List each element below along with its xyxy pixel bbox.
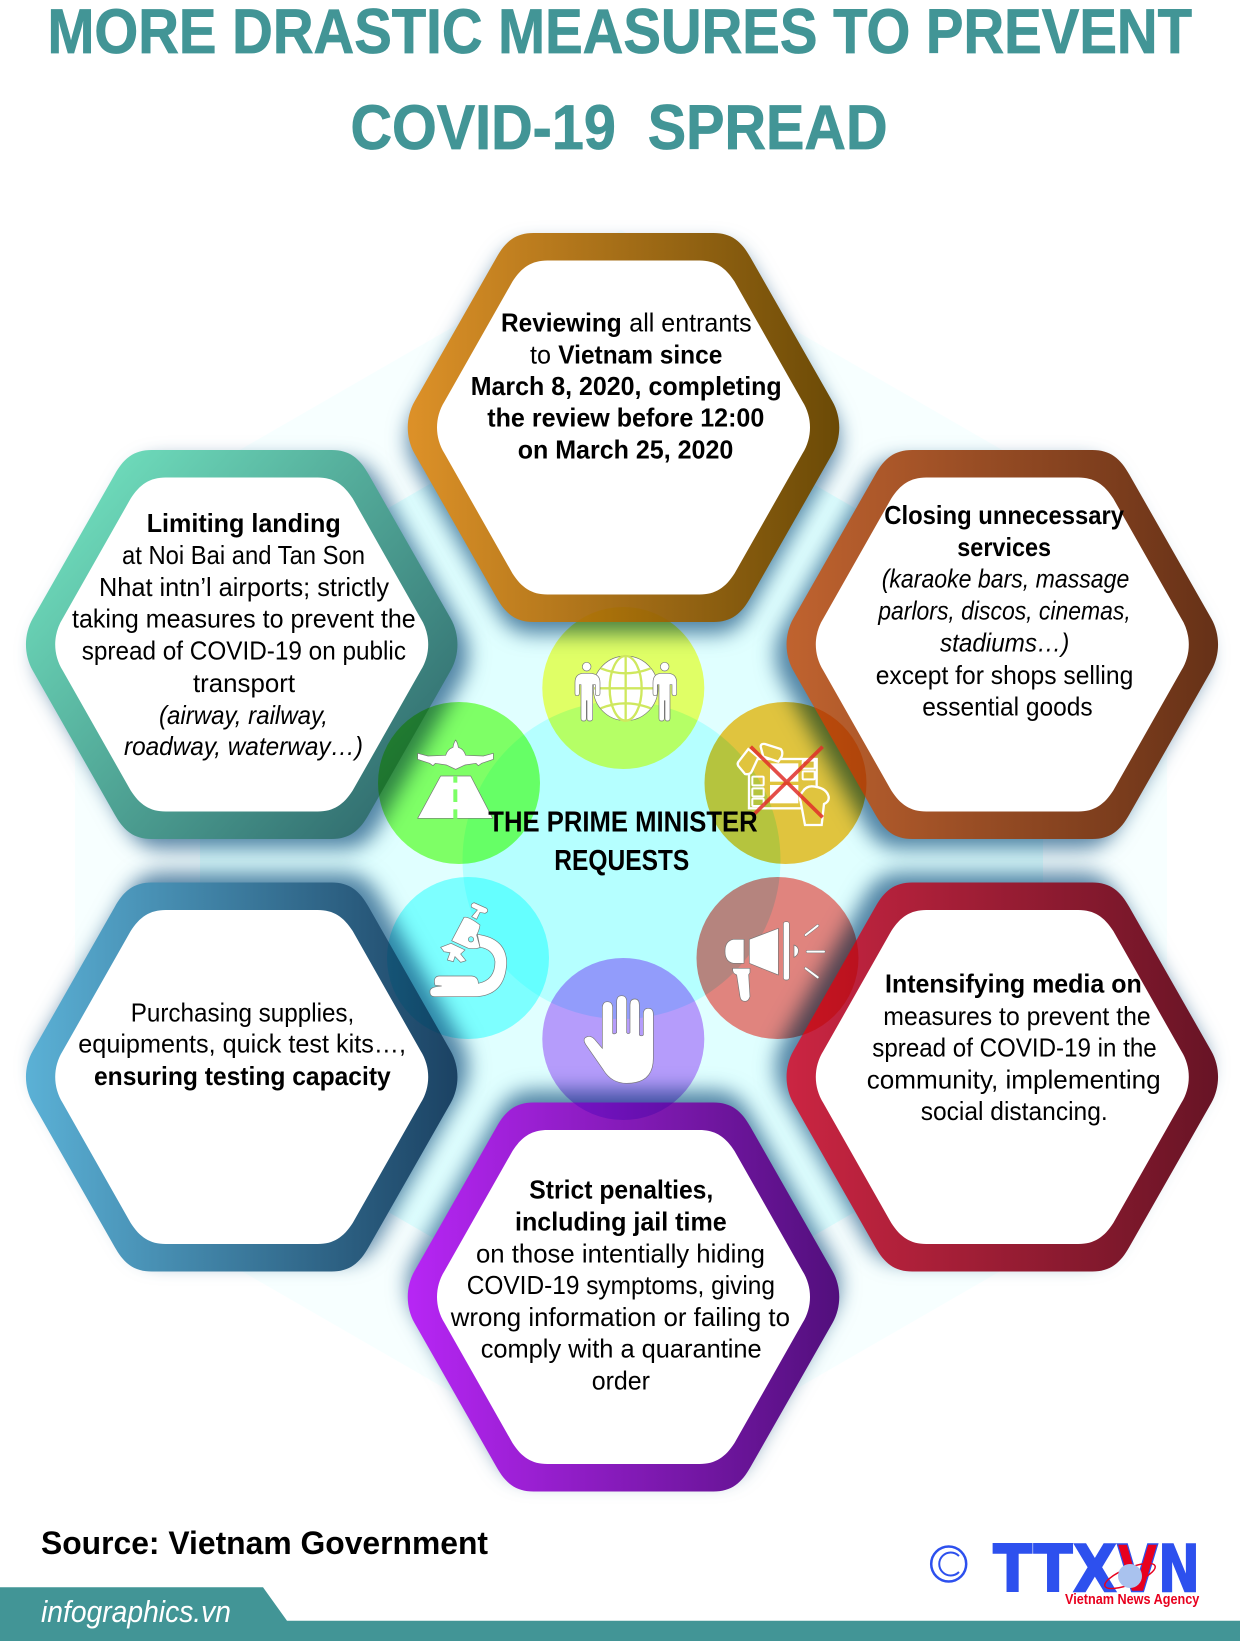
text block: strict penalties: order bbox=[592, 1365, 650, 1395]
footer website: infographics.vn bbox=[41, 1594, 231, 1629]
logo: TTXVN: TTX bbox=[993, 1532, 1117, 1608]
text block: limiting landing: taking measures to prevent the bbox=[72, 604, 416, 634]
source line: Source: Vietnam Government bbox=[41, 1525, 488, 1561]
text block: closing services: except for shops selling bbox=[876, 660, 1133, 690]
circle: red bbox=[696, 877, 858, 1039]
text block: limiting landing: spread of COVID-19 on public bbox=[82, 636, 406, 666]
icon: megaphone bbox=[725, 922, 824, 1001]
text block: closing services: (karaoke bars, massage bbox=[882, 564, 1129, 594]
text block: strict penalties: Strict penalties, bbox=[529, 1174, 713, 1204]
icon: cinema and popcorn crossed out bbox=[738, 744, 829, 825]
panel: purchasing supplies hexagon bbox=[26, 882, 457, 1272]
logo: TTXVN bbox=[993, 1532, 1200, 1608]
icon: copyright bbox=[931, 1546, 966, 1582]
text block: reviewing entrants: March 8, 2020, completing bbox=[471, 371, 782, 401]
panel: strict penalties hexagon bbox=[408, 1102, 839, 1492]
text block: closing services: essential goods bbox=[922, 692, 1093, 722]
text block: strict penalties: comply with a quarantine bbox=[481, 1334, 762, 1364]
center heading: REQUESTS bbox=[554, 845, 689, 877]
text block: limiting landing: roadway, waterway…) bbox=[124, 731, 363, 761]
background: central circle bbox=[462, 701, 780, 1019]
icon: stop hand bbox=[584, 996, 653, 1083]
text block: strict penalties: on those intentially hiding bbox=[476, 1239, 765, 1269]
text block: closing services: Closing unnecessary bbox=[884, 500, 1124, 530]
text block: reviewing entrants: Vietnam since bbox=[558, 339, 722, 369]
logo: TTXVN: V bbox=[1117, 1532, 1158, 1608]
text block: intensifying media: community, implementing bbox=[867, 1064, 1161, 1094]
center heading: THE PRIME MINISTER bbox=[488, 807, 758, 839]
panel: intensifying media hexagon bbox=[787, 882, 1218, 1272]
circle: lime bbox=[542, 607, 704, 769]
text block: limiting landing: (airway, railway, bbox=[159, 700, 328, 730]
icon: people and globe bbox=[575, 656, 677, 721]
text block: limiting landing bbox=[72, 508, 416, 761]
text block: reviewing entrants: Reviewing bbox=[501, 308, 622, 338]
circle: purple bbox=[542, 958, 704, 1120]
text block: closing services bbox=[876, 500, 1133, 722]
text block: intensifying media: spread of COVID-19 in the bbox=[872, 1033, 1157, 1063]
icon: microscope bbox=[430, 903, 507, 997]
text block: reviewing entrants: to bbox=[530, 339, 551, 369]
text block: strict penalties bbox=[450, 1174, 790, 1395]
text block: closing services: stadiums…) bbox=[940, 628, 1069, 658]
icon: plane landing on road bbox=[418, 740, 493, 819]
circle: yellow bbox=[704, 702, 866, 864]
text block: intensifying media: Intensifying media on bbox=[885, 969, 1142, 999]
footer band bbox=[0, 1587, 1240, 1641]
background: pale inner hexagon bbox=[200, 373, 1043, 1347]
panel: reviewing entrants hexagon bbox=[408, 233, 839, 622]
background: pale outer hexagon bbox=[75, 230, 1167, 1490]
text block: purchasing supplies bbox=[78, 998, 406, 1091]
title: COVID-19 SPREAD bbox=[350, 93, 888, 163]
text block: limiting landing: Limiting landing bbox=[147, 508, 341, 538]
text block: closing services: services bbox=[957, 532, 1051, 562]
text block: limiting landing: Nhat intn’l airports; strictly bbox=[99, 572, 389, 602]
text block: reviewing entrants: the review before 12:00 bbox=[487, 403, 764, 433]
logo: TTXVN: N bbox=[1158, 1532, 1200, 1608]
circle: green bbox=[378, 702, 540, 864]
text block: intensifying media: measures to prevent the bbox=[883, 1001, 1151, 1031]
text block: purchasing supplies: Purchasing supplies, bbox=[131, 998, 354, 1028]
text block: intensifying media bbox=[867, 969, 1161, 1126]
text block: reviewing entrants: all entrants bbox=[629, 308, 752, 338]
panel: closing services hexagon bbox=[787, 450, 1218, 839]
text block: strict penalties: wrong information or failing to bbox=[450, 1302, 790, 1332]
circle: cyan bbox=[387, 877, 549, 1039]
center heading bbox=[488, 807, 758, 877]
text block: closing services: parlors, discos, cinemas, bbox=[877, 595, 1131, 625]
text block: reviewing entrants bbox=[471, 308, 782, 464]
text block: strict penalties: COVID-19 symptoms, giving bbox=[467, 1270, 775, 1300]
text block: limiting landing: transport bbox=[193, 668, 296, 698]
text block: reviewing entrants: on March 25, 2020 bbox=[518, 434, 733, 464]
text block: purchasing supplies: equipments, quick test kits…, bbox=[78, 1029, 406, 1059]
text block: purchasing supplies: ensuring testing capacity bbox=[94, 1061, 391, 1091]
panel: limiting landing hexagon bbox=[26, 450, 457, 839]
title bbox=[48, 0, 1192, 163]
logo: TTXVN: Vietnam News Agency bbox=[1065, 1591, 1200, 1608]
text block: limiting landing: at Noi Bai and Tan Son bbox=[122, 540, 365, 570]
text block: intensifying media: social distancing. bbox=[921, 1096, 1108, 1126]
text block: strict penalties: including jail time bbox=[515, 1207, 727, 1237]
